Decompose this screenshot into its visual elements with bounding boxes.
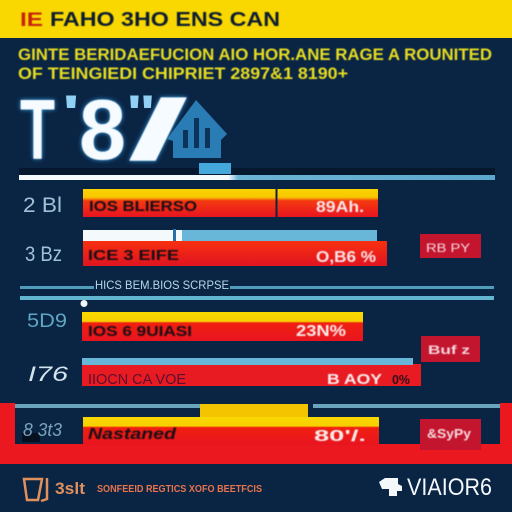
row 4 value: B AOY [327, 371, 382, 388]
section line [20, 296, 494, 300]
row 3 badge [421, 336, 480, 362]
hero statistic: 8 [79, 83, 126, 178]
row 1 bar [83, 189, 378, 217]
hero statistic: T [20, 83, 55, 178]
icon: house [167, 100, 227, 158]
subtitle: GINTE BERIDAEFUCION AIO HOR.ANE RAGE A ROUNITED [18, 46, 492, 64]
row 5 bar label: Nastaned [88, 426, 177, 443]
row 1 label: 2 Bl [23, 194, 62, 217]
row 5 value: 80'/. [314, 428, 366, 445]
yellow tab [200, 404, 308, 418]
row 4 bar label: IIOCN CA VOE [88, 371, 186, 388]
marker dot [80, 300, 88, 307]
divider tab [199, 163, 231, 174]
subtitle: OF TEINGIEDI CHIPRIET 2897&1 8190+ [18, 65, 348, 83]
footer [0, 464, 512, 512]
row 4 upper track [82, 358, 413, 365]
row 2 value: O,B6 % [316, 249, 376, 266]
row 4: 0% [392, 372, 410, 387]
section heading [20, 278, 494, 292]
divider line [19, 175, 495, 180]
hero statistic: / [127, 83, 189, 178]
row 5 label [22, 433, 40, 442]
row 2 bar label: ICE 3 EIFE [88, 247, 179, 264]
section heading: HICS BEM.BIOS SCRPSE [95, 278, 229, 292]
row 1 bar label: IOS BLIERSO [89, 198, 197, 215]
footer logo: 3slt [55, 479, 85, 498]
dark band [19, 168, 495, 175]
row 1 [23, 188, 378, 218]
row 4 label: I76 [28, 363, 68, 386]
lower lines [15, 404, 200, 408]
row 3 badge: Buf z [428, 343, 470, 357]
subtitle [18, 46, 492, 83]
header title: FAHO 3HO ENS CAN [50, 9, 280, 31]
row 2 label: 3 Bz [25, 243, 62, 266]
hero statistic: T [20, 83, 55, 178]
row 5: 8 3t3 [23, 420, 62, 440]
hero statistic [20, 83, 189, 178]
row 5 badge [420, 419, 481, 450]
header number: IE [20, 10, 43, 31]
row 2 [25, 229, 481, 266]
hero statistic: ' [62, 85, 80, 141]
footer logo [24, 478, 85, 501]
row 2: RB PY [426, 241, 470, 255]
row 5 [22, 417, 379, 445]
row 2 upper track [83, 230, 377, 241]
row 2 bar [83, 241, 387, 266]
hero statistic: / [127, 83, 189, 178]
row 3 value: 23N% [296, 323, 346, 340]
row 5 bar [83, 417, 379, 445]
row 1 value: 89Ah. [316, 199, 364, 216]
hero statistic: " [126, 85, 156, 141]
row 3 bar label: IOS 6 9UIASI [88, 323, 192, 340]
header band [0, 0, 512, 38]
lower red frame [0, 403, 512, 464]
footer brand [379, 474, 492, 501]
hero statistic: 8 [79, 83, 126, 178]
footer note: SONFEEID REGTICS XOFO BEETFCIS [97, 484, 262, 495]
row 4 [28, 358, 421, 388]
row 3 [27, 311, 363, 341]
row 3 bar [82, 312, 363, 341]
row 4 bar [82, 364, 421, 386]
footer brand: VIAIOR6 [407, 474, 492, 501]
row 5 badge: &SyPy [427, 426, 472, 441]
row 3 label: 5D9 [27, 311, 67, 332]
row 2 badge [420, 234, 481, 258]
